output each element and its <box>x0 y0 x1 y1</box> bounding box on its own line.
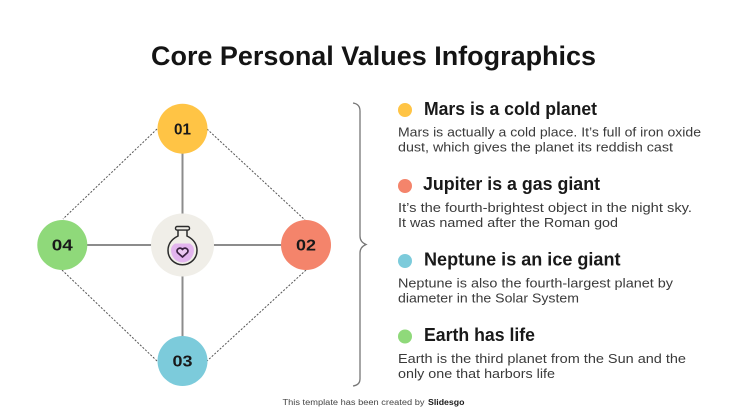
footer credit: This template has been created by <box>282 398 424 407</box>
node 02: 02 <box>296 238 316 254</box>
node 01: 01 <box>174 122 191 138</box>
item: Mars: Mars is a cold planet <box>424 99 597 119</box>
item: Neptune <box>398 250 674 306</box>
node 03: 03 <box>172 354 193 370</box>
item: Earth: Earth has life <box>424 325 535 345</box>
item: Mars: dust, which gives the planet its reddish cast <box>398 140 674 154</box>
item: Jupiter <box>398 174 692 230</box>
item: Jupiter: It was named after the Roman god <box>398 216 618 230</box>
center circle with flask icon <box>151 214 214 276</box>
item: Jupiter: It’s the fourth-brightest object in the night sky. <box>398 201 692 215</box>
node 03 <box>158 336 208 386</box>
item: Neptune: Neptune is also the fourth-largest planet by <box>398 276 674 290</box>
item: Jupiter: Jupiter is a gas giant <box>423 174 600 194</box>
node 04: 04 <box>52 238 73 254</box>
item: Earth: Earth is the third planet from the Sun and the <box>398 352 686 366</box>
footer credit <box>282 398 465 407</box>
node 01 <box>158 104 208 154</box>
node 04 <box>37 220 87 270</box>
diagram: four values around a flask <box>37 104 331 386</box>
item: Mars <box>398 99 701 154</box>
title: Core Personal Values Infographics <box>151 41 596 71</box>
item: Mars: Mars is actually a cold place. It’s full of iron oxide <box>398 126 701 140</box>
item: Neptune: Neptune is an ice giant <box>424 250 620 270</box>
item: Neptune: diameter in the Solar System <box>398 292 579 306</box>
bracket <box>353 103 366 386</box>
node 02 <box>281 220 331 270</box>
footer credit: Slidesgo <box>428 398 465 407</box>
item: Earth: only one that harbors life <box>398 367 555 381</box>
item: Earth <box>398 325 686 381</box>
